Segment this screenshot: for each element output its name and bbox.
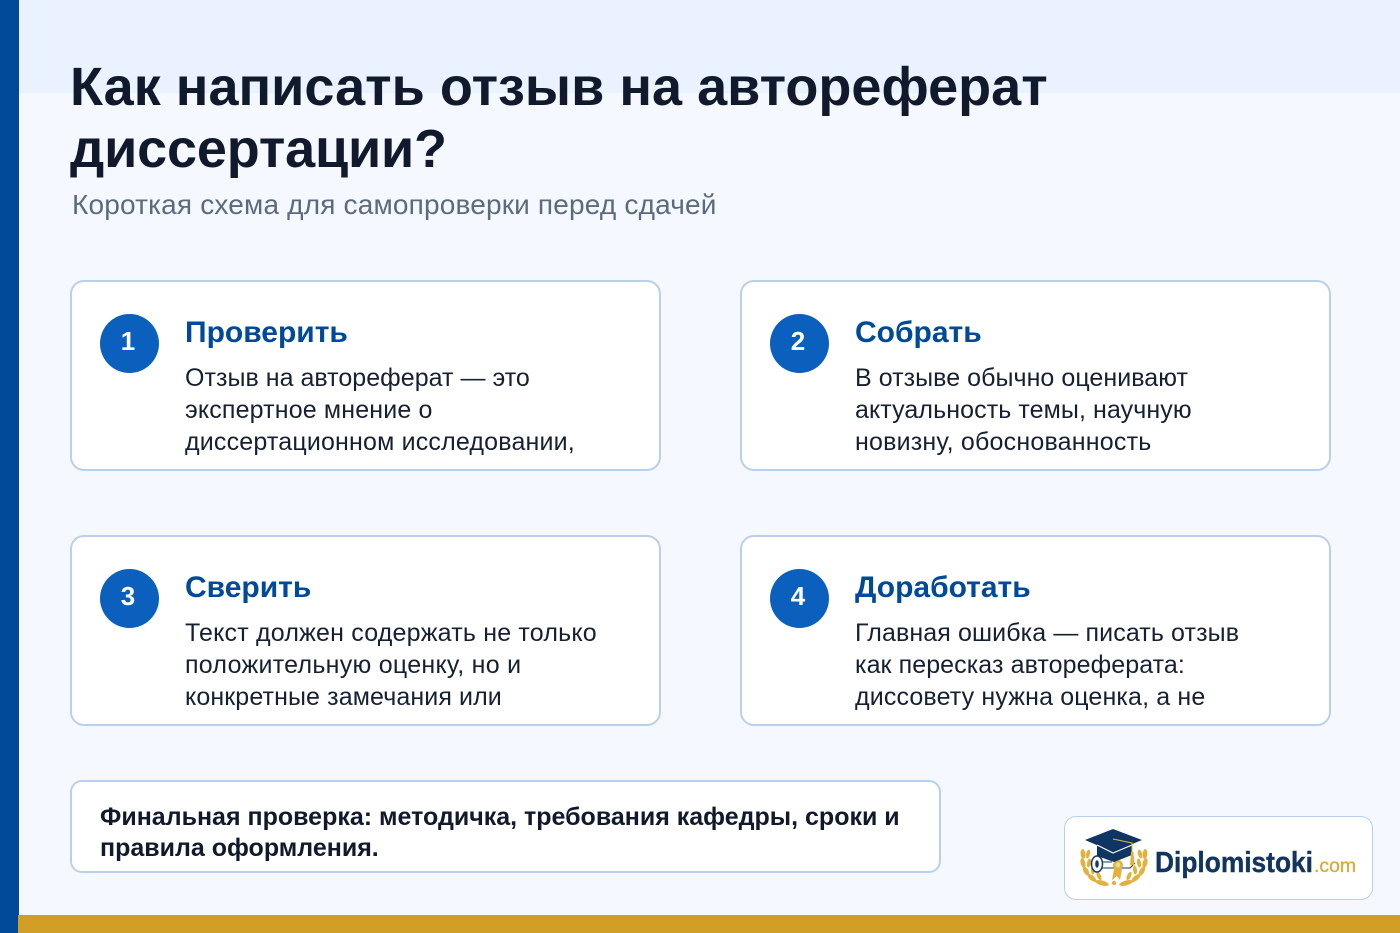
heading: Доработать: Доработать bbox=[855, 571, 1031, 604]
callout text: Финальная проверка: методичка, требования кафедры, сроки и bbox=[100, 803, 900, 831]
text: step 2: актуальность темы, научную bbox=[855, 396, 1192, 424]
step number 3 bbox=[100, 569, 159, 628]
text: step 1: экспертное мнение о bbox=[185, 396, 433, 424]
text: step 3: положительную оценку, но и bbox=[185, 651, 521, 679]
bottom accent bar bbox=[18, 915, 1400, 933]
subtitle: Короткая схема для самопроверки перед сдачей bbox=[72, 189, 717, 220]
step number 1 bbox=[100, 314, 159, 373]
text: step 3 bbox=[185, 619, 597, 711]
panel: step 3 bbox=[70, 535, 661, 726]
text: step 1: диссертационном исследовании, bbox=[185, 428, 575, 456]
callout text: правила оформления. bbox=[100, 834, 379, 862]
text: step 4 bbox=[855, 619, 1239, 711]
text: step 1: Отзыв на автореферат — это bbox=[185, 364, 530, 392]
text: step 1 bbox=[185, 364, 575, 456]
top header band bbox=[0, 0, 1400, 93]
icon: laurel wreath bbox=[1079, 849, 1149, 887]
text: step 2: новизну, обоснованность bbox=[855, 428, 1151, 456]
panel: step 2 bbox=[740, 280, 1331, 471]
step number 1: 1 bbox=[121, 326, 135, 356]
title: Как написать отзыв на автореферат bbox=[70, 57, 1048, 117]
title bbox=[70, 57, 1048, 179]
icon: graduation cap bbox=[1085, 829, 1142, 865]
heading: Сверить: Сверить bbox=[185, 571, 311, 604]
left accent bar bbox=[0, 0, 19, 933]
text: step 4: Главная ошибка — писать отзыв bbox=[855, 619, 1239, 647]
heading: Проверить: Проверить bbox=[185, 316, 348, 349]
text: step 3: конкретные замечания или bbox=[185, 683, 502, 711]
text: step 4: диссовету нужна оценка, а не bbox=[855, 683, 1205, 711]
logo card bbox=[1064, 816, 1373, 900]
wordmark suffix: .com bbox=[1314, 856, 1356, 877]
logo: Diplomistoki bbox=[1080, 829, 1356, 886]
wordmark: Diplomistoki bbox=[1155, 847, 1313, 879]
step number 2: 2 bbox=[791, 326, 805, 356]
panel: step 1 bbox=[70, 280, 661, 471]
text: step 3: Текст должен содержать не только bbox=[185, 619, 597, 647]
step number 4 bbox=[770, 569, 829, 628]
heading: Собрать: Собрать bbox=[855, 316, 982, 349]
panel: step 4 bbox=[740, 535, 1331, 726]
text: step 4: как пересказ автореферата: bbox=[855, 651, 1185, 679]
step number 3: 3 bbox=[121, 581, 135, 611]
callout text bbox=[100, 803, 900, 862]
text: step 2: В отзыве обычно оценивают bbox=[855, 364, 1188, 392]
title: диссертации? bbox=[70, 119, 447, 179]
icon: diploma scroll bbox=[1092, 856, 1135, 880]
step number 4: 4 bbox=[791, 581, 805, 611]
callout: final check bbox=[70, 780, 941, 873]
step number 2 bbox=[770, 314, 829, 373]
text: step 2 bbox=[855, 364, 1192, 456]
